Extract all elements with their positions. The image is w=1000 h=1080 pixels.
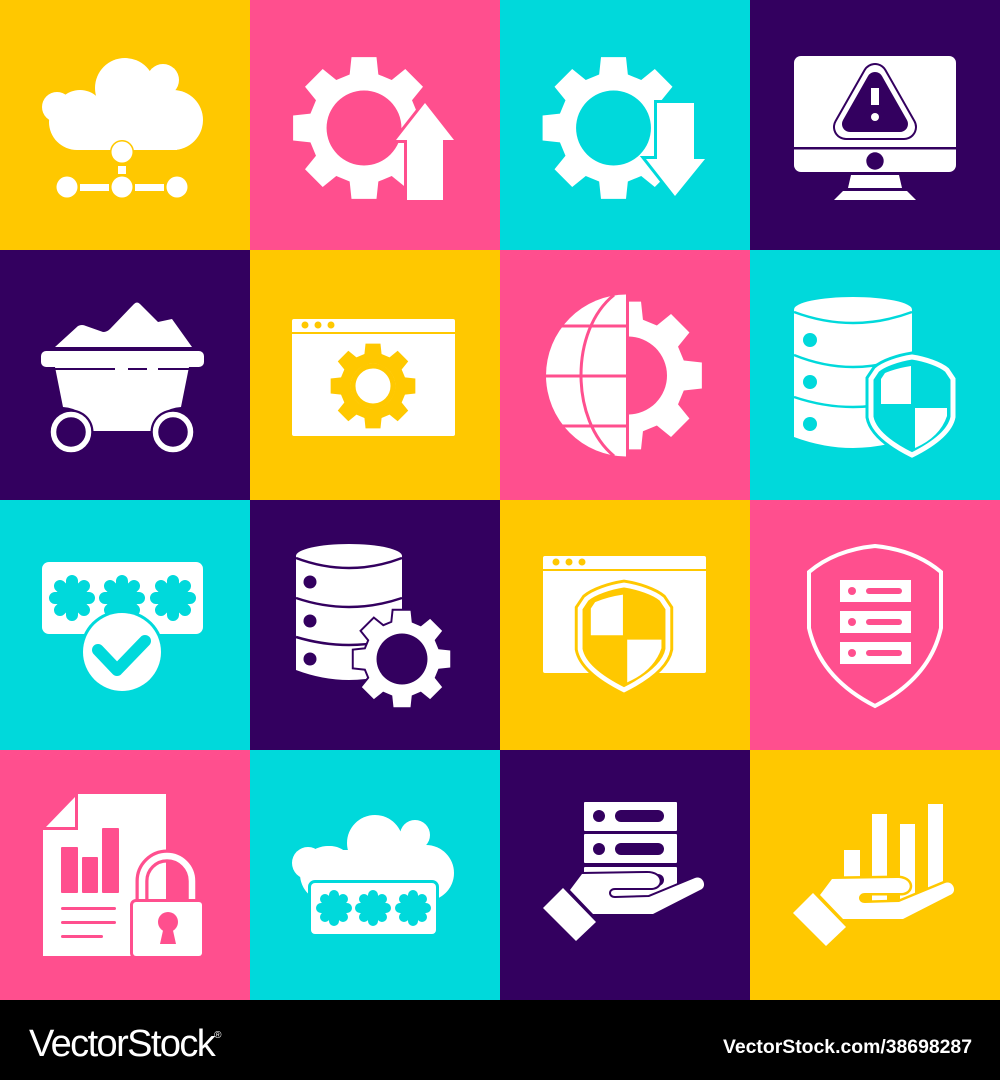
icon: database with gear	[296, 544, 450, 707]
icon: cloud network	[42, 58, 203, 198]
icon: gear with up arrow	[293, 57, 454, 200]
icon: cloud with password	[292, 815, 454, 934]
footer: VectorStock logo: VectorStock	[29, 1023, 214, 1065]
icon: hand holding server	[543, 802, 704, 941]
icon: database with shield	[794, 297, 953, 455]
icon: shield with server	[809, 546, 941, 706]
footer: VectorStock logo: ®	[214, 1030, 222, 1041]
icon: document with lock	[43, 794, 202, 956]
footer: image id: VectorStock.com/38698287	[723, 1036, 972, 1058]
icon: browser with gear	[292, 319, 455, 436]
icon: mine cart	[41, 302, 204, 454]
icon: browser with shield	[543, 556, 706, 690]
icon: gear with down arrow	[543, 57, 705, 199]
icon: monitor with warning	[794, 56, 956, 200]
icon: globe and gear	[540, 294, 708, 456]
icon: password check	[42, 562, 203, 691]
icon: hand holding bar chart	[793, 804, 954, 946]
